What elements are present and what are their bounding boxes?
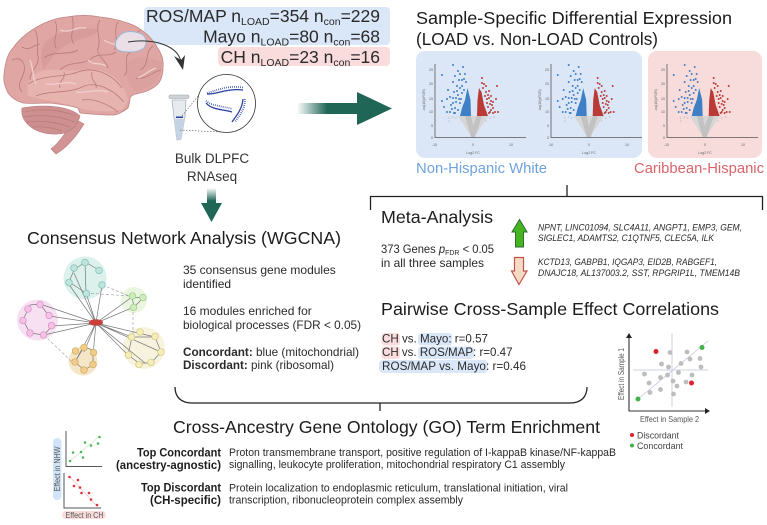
volcano plot 2: 15 <box>545 97 549 101</box>
panel: Caribbean-Hispanic volcano plot: 5 <box>663 124 665 128</box>
volcano plot 2 <box>538 64 642 155</box>
icon: RNA magnified <box>198 74 256 132</box>
ROS/MAP sample size: con <box>324 16 341 28</box>
volcano plot 1: -log10(pFDR) <box>422 89 426 111</box>
brain illustration <box>4 16 163 154</box>
volcano plot 1: Log2 FC <box>466 151 480 155</box>
volcano plot 1: 15 <box>429 97 433 101</box>
ROS/MAP sample size: LOAD <box>241 16 270 28</box>
text: upregulated genes <box>538 222 742 243</box>
icon: down arrow <box>512 258 527 284</box>
heading: differential expression: (LOAD vs. Non-LOAD Controls) <box>416 29 658 49</box>
volcano plot 1: 25 <box>429 68 433 72</box>
heading: meta-analysis: Meta-Analysis <box>381 207 493 227</box>
text: concordant terms: signalling, leukocyte proliferation, mitochondrial respiratory C1 assembly <box>229 459 566 471</box>
panel: Caribbean-Hispanic volcano plot: -10 <box>664 143 669 147</box>
CH sample size: CH n <box>221 47 260 67</box>
label: Caribbean-Hispanic: Caribbean-Hispanic <box>634 160 764 177</box>
ROS/MAP sample size: =354 n <box>270 6 324 26</box>
volcano plot 2: 0 <box>547 136 549 140</box>
text: downregulated genes: KCTD13, GABPB1, IQGAP3, EID2B, RABGEF1, <box>538 256 717 267</box>
cohort sample sizes <box>144 6 390 69</box>
CH sample size: LOAD <box>260 57 290 69</box>
text: downregulated genes: DNAJC18, AL137003.2, SST, RPGRIP1L, TMEM14B <box>538 267 740 278</box>
text: concordant terms: Proton transmembrane transport, positive regulation of I-kappaB kinase/NF-kappaB <box>229 447 616 459</box>
text: upregulated genes: SIGLEC1, ADAMTS2, C1QTNF5, CLEC5A, ILK <box>538 232 715 243</box>
scatter plot: sample effects <box>616 333 710 424</box>
text: network results: Discordant: pink (ribosomal) <box>183 358 334 372</box>
text: network results <box>183 263 361 372</box>
icon: sample tube <box>169 90 220 140</box>
panel: Caribbean-Hispanic volcano plot: 25 <box>661 68 665 72</box>
chart: concordant and discordant effects <box>52 431 106 520</box>
volcano plot 2: 0 <box>588 143 590 147</box>
heading: differential expression: Sample-Specific Differential Expression <box>416 8 732 28</box>
panel: Caribbean-Hispanic volcano plot: 0 <box>663 136 665 140</box>
y-axis label: Effect in Sample 1 <box>616 348 626 400</box>
label: top concordant: (ancestry-agnostic) <box>116 460 221 472</box>
volcano plot 1: 5 <box>431 124 433 128</box>
text: correlations: CH vs. ROS/MAP: r=0.47 <box>382 345 513 359</box>
heading: consensus network analysis: Consensus Network Analysis (WGCNA) <box>27 228 341 248</box>
volcano plot 2: 10 <box>625 143 629 147</box>
bracket: bottom <box>175 387 587 411</box>
CH sample size: =23 n <box>289 47 333 67</box>
volcano plot 1: 0 <box>431 136 433 140</box>
heading: gene ontology enrichment: Cross-Ancestry Gene Ontology (GO) Term Enrichment <box>173 417 600 437</box>
label: top concordant <box>116 448 221 472</box>
text: network results: 16 modules enriched for <box>183 304 312 318</box>
text: discordant terms: transcription, ribonucleoprotein complex assembly <box>229 494 464 506</box>
panel: Caribbean-Hispanic volcano plot: -log10(pFDR) <box>654 89 658 111</box>
network diagram <box>17 256 165 376</box>
Mayo sample size: LOAD <box>260 36 290 48</box>
Mayo sample size: =80 n <box>289 26 333 46</box>
volcano plot 1: -10 <box>432 143 437 147</box>
text: correlations <box>379 332 526 373</box>
icon: up arrow <box>512 220 527 247</box>
legend: scatter <box>630 430 683 451</box>
bracket: top <box>370 185 762 210</box>
curved arrow: brain to sample <box>128 41 185 70</box>
panel: Caribbean-Hispanic volcano plot: Log2 FC <box>698 151 712 155</box>
text: downregulated genes <box>538 256 740 278</box>
volcano plot 2: 10 <box>545 110 549 114</box>
chart: concordant and discordant effects: Effect in CH <box>66 510 104 520</box>
volcano plot 1 <box>422 64 526 155</box>
volcano plot 2: Log2 FC <box>582 151 596 155</box>
text: discordant terms: Protein localization to endoplasmic reticulum, translational initiation, viral <box>229 482 568 494</box>
arrow: to differential expression <box>297 92 392 125</box>
text: network results: identified <box>183 277 231 291</box>
label: top discordant <box>141 482 221 507</box>
text: network results: biological processes (FDR < 0.05) <box>183 318 361 332</box>
label: top discordant: (CH-specific) <box>150 495 221 507</box>
volcano plot 2: 5 <box>547 124 549 128</box>
volcano plot 2: 20 <box>545 82 549 86</box>
volcano plot 1: 10 <box>429 110 433 114</box>
panel: Caribbean-Hispanic volcano plot <box>648 51 762 158</box>
volcano plot 1: 20 <box>429 82 433 86</box>
legend: scatter: Discordant <box>637 430 679 440</box>
text: discordant terms <box>229 482 568 506</box>
heading: pairwise correlations: Pairwise Cross-Sample Effect Correlations <box>381 299 719 319</box>
label: Bulk DLPFC RNAseq: RNAseq <box>187 169 237 184</box>
panel: non-Hispanic White volcano plots <box>416 51 642 158</box>
text: correlations: ROS/MAP vs. Mayo: r=0.46 <box>382 359 526 373</box>
panel: Caribbean-Hispanic volcano plot: 20 <box>661 82 665 86</box>
CH sample size: con <box>333 57 350 69</box>
text: meta-analysis result: FDR <box>445 248 460 257</box>
panel: Caribbean-Hispanic volcano plot: 0 <box>704 143 706 147</box>
text: network results: Concordant: blue (mitochondrial) <box>183 345 359 359</box>
legend: scatter: Concordant <box>637 441 683 451</box>
volcano plot 1: 0 <box>472 143 474 147</box>
label: top discordant: Top Discordant <box>141 482 221 494</box>
label: Non-Hispanic White: Non-Hispanic White <box>416 160 547 177</box>
ROS/MAP sample size: ROS/MAP n <box>146 6 241 26</box>
Mayo sample size: con <box>333 36 350 48</box>
CH sample size: =16 <box>350 47 380 67</box>
chart: concordant and discordant effects: Effect in NHW <box>52 446 62 492</box>
label: top concordant: Top Concordant <box>137 448 221 460</box>
text: meta-analysis result <box>381 242 494 270</box>
panel: Caribbean-Hispanic volcano plot: 10 <box>661 110 665 114</box>
heading: differential expression <box>416 8 732 49</box>
panel: Caribbean-Hispanic volcano plot: 10 <box>741 143 745 147</box>
volcano plot 2: 25 <box>545 68 549 72</box>
Mayo sample size: =68 <box>350 26 380 46</box>
Mayo sample size: Mayo n <box>203 26 260 46</box>
dorsolateral prefrontal cortex highlight <box>115 32 146 52</box>
text: meta-analysis result: in all three samples <box>381 256 484 270</box>
text: network results: 35 consensus gene modules <box>183 263 336 277</box>
text: upregulated genes: NPNT, LINC01094, SLC4A11, ANGPT1, EMP3, GEM, <box>538 222 742 232</box>
text: concordant terms <box>229 447 616 471</box>
arrow: to network analysis <box>201 188 222 222</box>
text: meta-analysis result: 373 Genes p <box>381 242 446 256</box>
panel: Caribbean-Hispanic volcano plot: 15 <box>661 97 665 101</box>
x-axis label: Effect in Sample 2 <box>640 414 699 424</box>
text: correlations: CH vs. Mayo: r=0.57 <box>382 332 488 346</box>
label: Bulk DLPFC RNAseq <box>175 151 249 184</box>
volcano plot 2: -10 <box>548 143 553 147</box>
volcano plot 2: -log10(pFDR) <box>538 89 542 111</box>
text: meta-analysis result: < 0.05 <box>459 242 494 256</box>
ROS/MAP sample size: =229 <box>341 6 380 26</box>
volcano plot 1: 10 <box>509 143 513 147</box>
label: Bulk DLPFC RNAseq: Bulk DLPFC <box>175 151 249 166</box>
